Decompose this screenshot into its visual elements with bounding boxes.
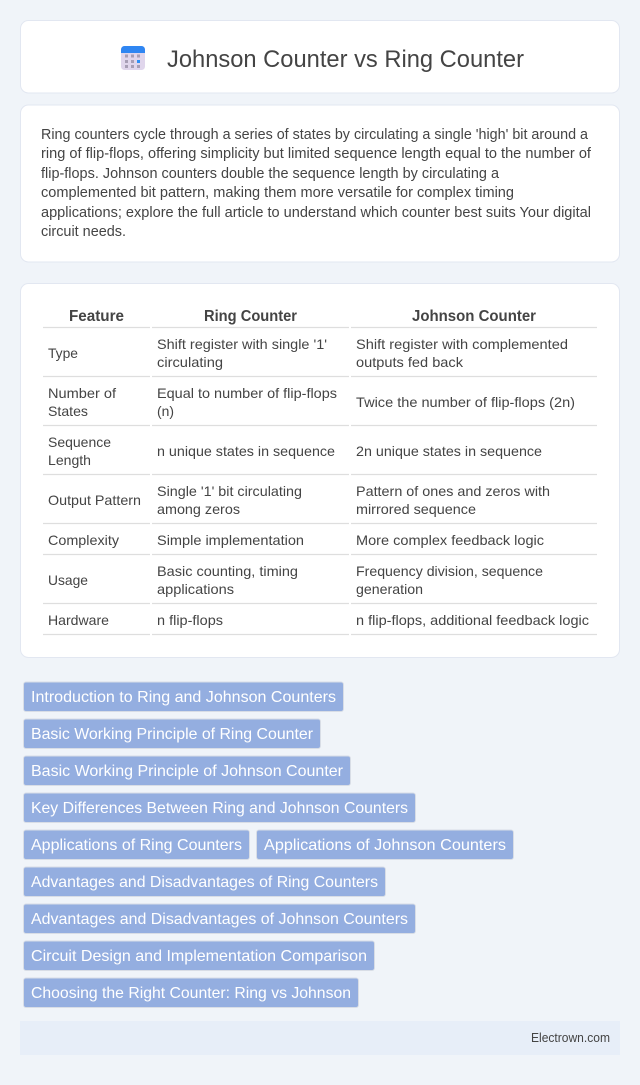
row: usage: Basic counting, timing <box>157 563 298 579</box>
row: number of states: States <box>48 403 88 419</box>
panel: comparison table <box>20 284 620 658</box>
row: usage: Frequency division, sequence <box>356 563 543 579</box>
row: usage: applications <box>157 581 234 597</box>
row: type: Type <box>48 345 78 361</box>
tag: choosing <box>24 978 358 1008</box>
row: hardware: Hardware <box>48 612 109 628</box>
intro text: Ring counters cycle through a series of states by circulating a single 'high' bit around a <box>41 127 588 143</box>
row: type <box>48 336 568 370</box>
tag: circuit design <box>24 941 374 970</box>
tag: introduction: Introduction to Ring and Johnson Counters <box>31 689 336 706</box>
row: usage: Usage <box>48 572 88 588</box>
intro text: circuit needs. <box>41 224 126 240</box>
tag: johnson principle: Basic Working Principle of Johnson Counter <box>31 763 344 780</box>
tag: ring applications <box>24 830 250 860</box>
tag: choosing: Choosing the Right Counter: Ring vs Johnson <box>31 985 351 1002</box>
row: sequence length: Length <box>48 452 91 468</box>
row: complexity: Complexity <box>48 532 119 548</box>
row: type: outputs fed back <box>356 354 464 370</box>
row: sequence length <box>48 434 542 468</box>
row: number of states <box>48 385 575 419</box>
row: number of states: Twice the number of flip-flops (2n) <box>356 394 575 410</box>
intro text: ring of flip-flops, offering simplicity but limited sequence length equal to the number of <box>41 146 591 162</box>
tag: johnson principle <box>24 756 350 786</box>
row: sequence length: Sequence <box>48 434 111 450</box>
row: output pattern: among zeros <box>157 501 240 517</box>
intro text <box>41 127 591 240</box>
row: output pattern: Pattern of ones and zeros with <box>356 483 550 499</box>
table header row: Ring Counter <box>204 308 297 325</box>
title: Johnson Counter vs Ring Counter <box>167 46 524 73</box>
tag: key differences <box>24 793 416 822</box>
row: complexity: More complex feedback logic <box>356 532 544 548</box>
row: hardware: n flip-flops <box>157 612 223 628</box>
row: hardware: n flip-flops, additional feedback logic <box>356 612 589 628</box>
row: type: Shift register with complemented <box>356 336 568 352</box>
table header row: Feature <box>69 308 124 325</box>
row: output pattern <box>48 483 550 517</box>
tag: johnson pros and cons: Advantages and Disadvantages of Johnson Counters <box>31 911 408 928</box>
row: sequence length: 2n unique states in sequence <box>356 443 542 459</box>
intro text: complemented bit pattern, making them more versatile for complex timing <box>41 185 514 201</box>
row: usage: generation <box>356 581 423 597</box>
tag: circuit design: Circuit Design and Implementation Comparison <box>31 948 367 965</box>
row: type: circulating <box>157 354 223 370</box>
row: number of states: Number of <box>48 385 116 401</box>
tag: ring pros and cons: Advantages and Disadvantages of Ring Counters <box>31 874 378 891</box>
tag: johnson applications: Applications of Johnson Counters <box>264 837 506 854</box>
row: hardware <box>48 612 589 628</box>
footer credit: Electrown.com <box>531 1031 610 1045</box>
table header row: Johnson Counter <box>412 308 536 325</box>
icon: calendar <box>121 46 145 70</box>
footer <box>20 1021 620 1055</box>
row: number of states: (n) <box>157 403 174 419</box>
tag: key differences: Key Differences Between Ring and Johnson Counters <box>31 800 408 817</box>
tag: johnson applications <box>256 830 514 860</box>
row: sequence length: n unique states in sequence <box>157 443 335 459</box>
tag list: related topics <box>24 682 514 1008</box>
header panel <box>20 20 620 93</box>
tag: ring applications: Applications of Ring Counters <box>31 837 242 854</box>
tag: ring principle <box>24 719 320 748</box>
row: output pattern: mirrored sequence <box>356 501 476 517</box>
row: complexity <box>48 532 544 548</box>
table header row <box>69 308 536 325</box>
row: output pattern: Output Pattern <box>48 492 141 508</box>
row: usage <box>48 563 543 597</box>
tag: johnson pros and cons <box>24 904 416 934</box>
tag: ring pros and cons <box>24 867 386 896</box>
intro text: applications; explore the full article to understand which counter best suits Your digital <box>41 205 591 221</box>
row: output pattern: Single '1' bit circulating <box>157 483 302 499</box>
panel: intro paragraph <box>20 105 620 262</box>
tag: ring principle: Basic Working Principle of Ring Counter <box>31 726 314 743</box>
row: complexity: Simple implementation <box>157 532 304 548</box>
tag: introduction <box>24 682 344 712</box>
row: type: Shift register with single '1' <box>157 336 327 352</box>
row: number of states: Equal to number of flip-flops <box>157 385 337 401</box>
intro text: flip-flops. Johnson counters double the sequence length by circulating a <box>41 166 499 182</box>
